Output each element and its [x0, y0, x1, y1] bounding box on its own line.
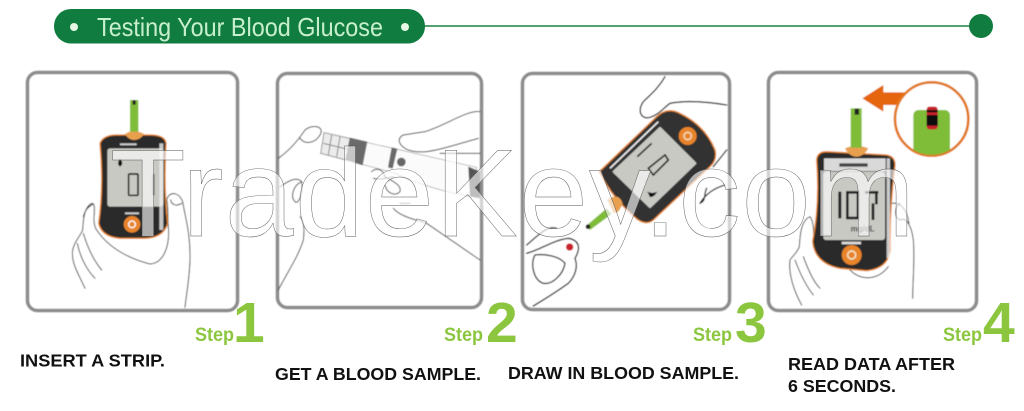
step 4 label: 4 — [983, 291, 1015, 355]
step 2 label: 2 — [486, 291, 518, 355]
caption: step 1: INSERT A STRIP. — [20, 350, 165, 370]
step 4 label — [943, 291, 1015, 355]
panel: step 2 get blood sample — [278, 74, 482, 308]
step 4 label: Step — [943, 324, 982, 346]
step 2 label: Step — [444, 324, 483, 346]
panel: step 4 read data — [768, 72, 976, 310]
caption: step 2: GET A BLOOD SAMPLE. — [275, 364, 481, 384]
caption: step 4: READ DATA AFTER — [788, 354, 955, 374]
step 3 label — [693, 291, 767, 355]
step 2 label — [444, 291, 518, 355]
caption: step 3: DRAW IN BLOOD SAMPLE. — [508, 363, 739, 383]
panel: step 3 draw in blood sample — [522, 74, 730, 310]
header banner — [54, 9, 993, 44]
caption: step 4: 6 SECONDS. — [788, 376, 896, 396]
panel: step 4 read data: mg/dL — [851, 225, 875, 234]
header banner: Testing Your Blood Glucose — [97, 12, 383, 42]
caption: step 4 — [788, 354, 955, 396]
step 1 label: 1 — [233, 291, 265, 355]
step 1 label: Step — [195, 324, 234, 346]
step 3 label: Step — [693, 324, 732, 346]
step 3 label: 3 — [735, 291, 767, 355]
step 1 label — [195, 291, 265, 355]
panel: step 1 insert strip — [28, 72, 238, 310]
watermark: TradeKey.com — [110, 125, 915, 263]
